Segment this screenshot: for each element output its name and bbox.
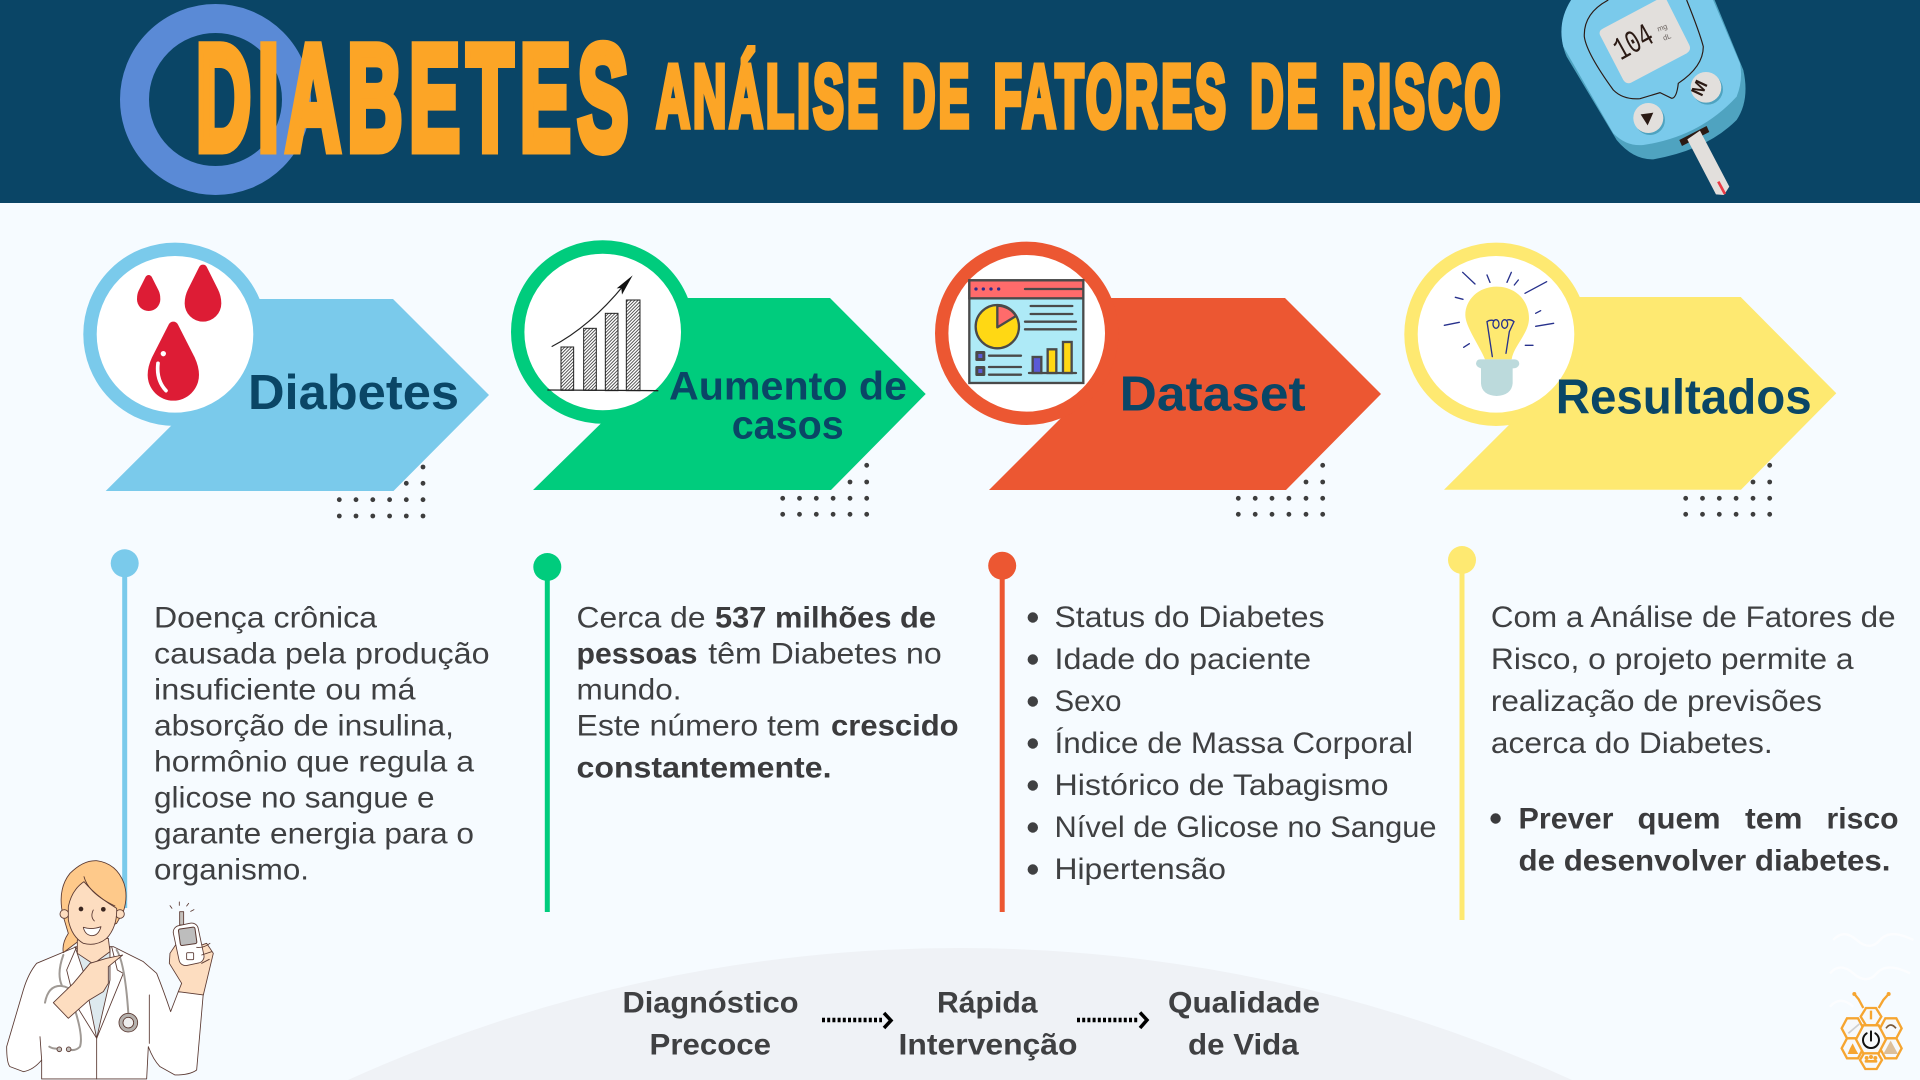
- footer hump: [348, 948, 1572, 1080]
- step: rápida intervenção: Intervenção: [898, 1029, 1078, 1062]
- step: diagnóstico precoce: [622, 987, 798, 1062]
- heading: Aumento de: [669, 364, 907, 408]
- text block: diabetes description: [154, 601, 490, 886]
- panel: resultados: [1411, 249, 1836, 517]
- icon: light bulb: [1444, 272, 1554, 396]
- step: qualidade de vida: Qualidade: [1168, 987, 1320, 1020]
- heading: casos: [732, 403, 844, 447]
- icon: glucose meter: M: [1687, 77, 1712, 99]
- step: rápida intervenção: Rápida: [937, 987, 1038, 1020]
- step: qualidade de vida: de Vida: [1188, 1029, 1299, 1062]
- timeline: dataset column: [988, 552, 1016, 912]
- title: DIABETES: DIABETES: [196, 14, 635, 182]
- text block: aumento de casos description: pessoas: [576, 637, 698, 670]
- list: dataset variables: Histórico de Tabagismo: [1054, 769, 1388, 802]
- header band: [0, 0, 1920, 203]
- text block: diabetes description: organismo.: [154, 853, 309, 886]
- icon: glucose meter: 104: [1608, 18, 1660, 69]
- text block: resultados description: Risco, o projeto permite a: [1491, 643, 1854, 676]
- heading: Diabetes: [248, 366, 459, 420]
- text block: aumento de casos description: Cerca de: [576, 601, 706, 634]
- list: dataset variables: Idade do paciente: [1054, 643, 1311, 676]
- text block: aumento de casos description: [576, 601, 959, 784]
- arrow 2: [1077, 1012, 1147, 1028]
- text block: diabetes description: hormônio que regula a: [154, 745, 474, 778]
- timeline: resultados column: [1448, 546, 1476, 920]
- icon: blood drops: [137, 265, 221, 401]
- step: rápida intervenção: [898, 987, 1078, 1062]
- panel: aumento de casos: [518, 247, 926, 517]
- text block: resultados description: realização de previsões: [1491, 685, 1822, 718]
- dot pattern: [1683, 463, 1772, 517]
- icon: rising bar chart: [547, 275, 658, 391]
- panel: dataset: [942, 248, 1381, 517]
- text block: aumento de casos description: mundo.: [576, 673, 682, 706]
- text block: aumento de casos description: têm Diabetes no: [708, 637, 942, 670]
- text block: aumento de casos description: Este número tem: [576, 709, 820, 742]
- icon: dashboard window: [969, 280, 1083, 383]
- list: dataset variables: [1028, 601, 1436, 886]
- text block: aumento de casos description: crescido: [831, 709, 959, 742]
- step: diagnóstico precoce: Diagnóstico: [622, 987, 798, 1020]
- text block: resultados description: Prever: [1518, 802, 1614, 835]
- list: dataset variables: Hipertensão: [1054, 853, 1226, 886]
- heading: Dataset: [1120, 368, 1306, 422]
- heading: [669, 364, 907, 447]
- text block: aumento de casos description: 537 milhões de: [715, 601, 936, 634]
- illustration: doctor with glucose meter: [7, 861, 213, 1079]
- list: dataset variables: Índice de Massa Corporal: [1054, 727, 1413, 760]
- text block: diabetes description: causada pela produção: [154, 637, 490, 670]
- text block: diabetes description: absorção de insulina,: [154, 709, 454, 742]
- text block: resultados description: [1490, 601, 1898, 877]
- dot pattern: [1236, 463, 1325, 517]
- list: dataset variables: Sexo: [1054, 685, 1122, 718]
- text block: diabetes description: garante energia para o: [154, 817, 474, 850]
- text block: resultados description: de desenvolver diabetes.: [1518, 844, 1890, 877]
- timeline: aumento column: [533, 553, 561, 912]
- timeline: diabetes column: [111, 549, 139, 908]
- text block: resultados description: acerca do Diabetes.: [1491, 727, 1773, 760]
- list: dataset variables: Nível de Glicose no Sangue: [1054, 811, 1436, 844]
- dot pattern: [780, 463, 869, 517]
- text block: diabetes description: Doença crônica: [154, 601, 377, 634]
- dot pattern: [337, 465, 425, 518]
- text block: resultados description: risco: [1826, 802, 1898, 835]
- text block: resultados description: quem: [1638, 802, 1720, 835]
- step: diagnóstico precoce: Precoce: [650, 1029, 771, 1062]
- text block: diabetes description: glicose no sangue e: [154, 781, 435, 814]
- text block: resultados description: tem: [1745, 802, 1802, 835]
- text block: resultados description: Com a Análise de Fatores de: [1491, 601, 1896, 634]
- panel: diabetes: [90, 249, 489, 518]
- heading: Resultados: [1556, 371, 1812, 425]
- list: dataset variables: Status do Diabetes: [1054, 601, 1324, 634]
- arrow 1: [822, 1013, 891, 1028]
- step: qualidade de vida: [1168, 987, 1320, 1062]
- text block: diabetes description: insuficiente ou má: [154, 673, 416, 706]
- icon: glucose meter: dL: [1662, 31, 1672, 43]
- icon: blue diabetes ring: [134, 18, 296, 180]
- text block: aumento de casos description: constantemente.: [576, 752, 832, 784]
- footer flow: diagnosis to quality of life: [622, 987, 1320, 1062]
- icon: glucose meter: mg: [1656, 22, 1669, 34]
- logo: honeycomb power icon: [1830, 934, 1913, 1069]
- icon: glucose meter: [1561, 0, 1746, 195]
